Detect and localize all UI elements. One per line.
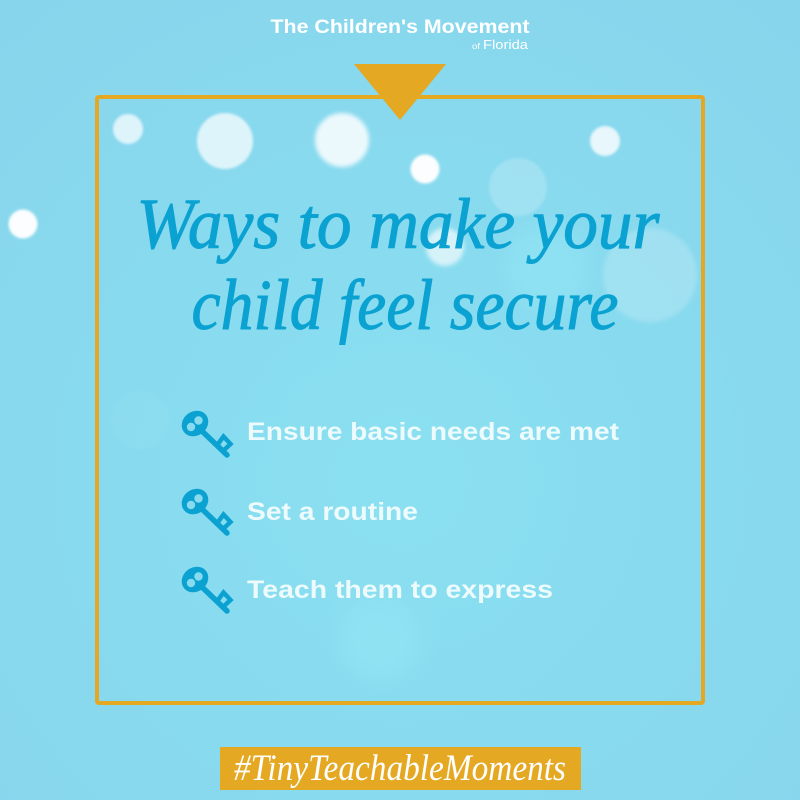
title: child feel secure: [192, 265, 618, 345]
bokeh lights: [8, 113, 697, 680]
gold frame: [97, 97, 703, 703]
label: Teach them to express: [247, 576, 553, 604]
title: Ways to make your: [136, 184, 660, 264]
gold triangle: [354, 64, 446, 120]
label: Ensure basic needs are met: [247, 418, 620, 446]
title: [136, 184, 660, 345]
list item: routine: [177, 483, 418, 533]
logo: Florida: [483, 37, 529, 52]
hashtag banner: #TinyTeachableMoments: [234, 748, 566, 789]
logo: of: [472, 42, 481, 51]
list item: express: [177, 561, 553, 611]
list item: basic needs: [177, 405, 620, 455]
icon: key: [177, 561, 230, 611]
logo: [270, 17, 530, 52]
icon: key: [177, 405, 230, 455]
label: Set a routine: [247, 498, 418, 526]
logo: The Children's Movement: [270, 17, 530, 38]
icon: key: [177, 483, 230, 533]
